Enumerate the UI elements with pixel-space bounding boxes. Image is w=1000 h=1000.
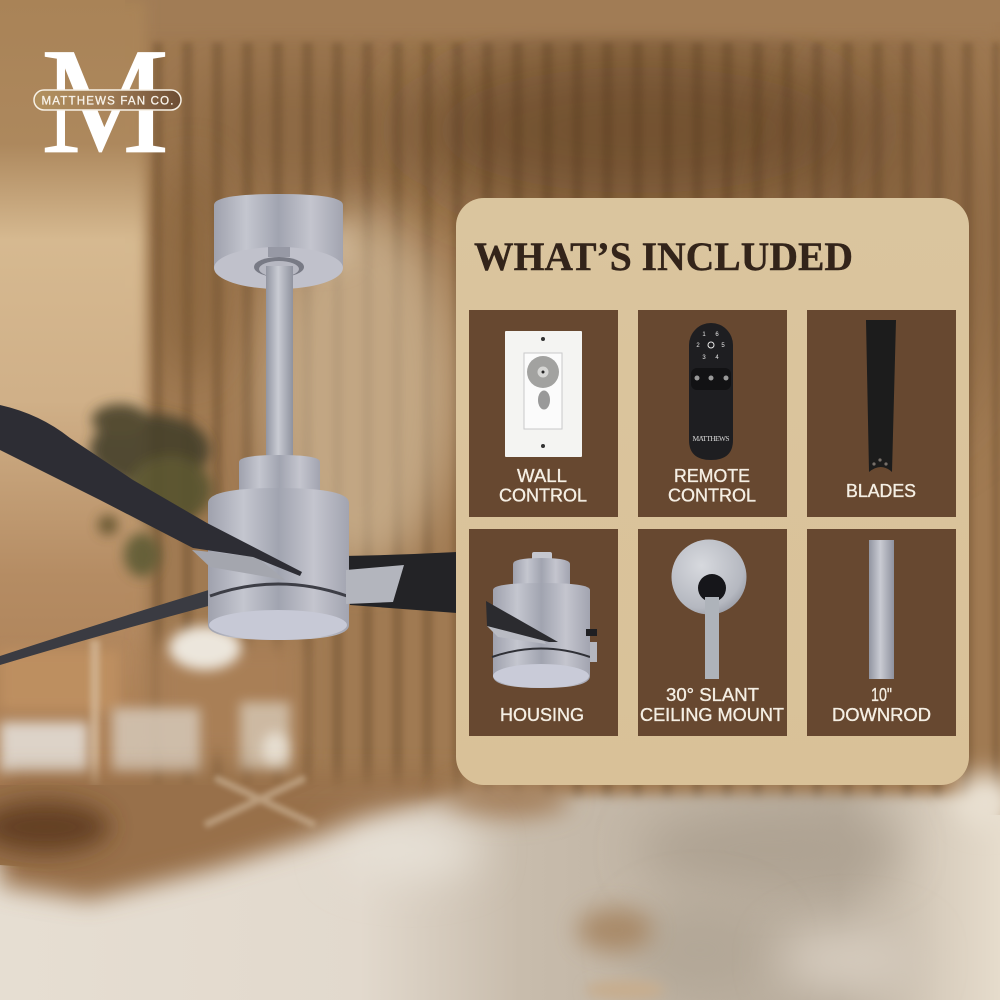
downrod bbox=[266, 266, 293, 456]
logo: Matthews Fan Co.: MATTHEWS FAN CO. bbox=[42, 96, 174, 108]
icon: remote: 6 bbox=[715, 332, 719, 338]
card: remote control: CONTROL bbox=[668, 486, 756, 506]
icon: remote: 3 bbox=[702, 355, 706, 361]
card: slant ceiling mount: CEILING MOUNT bbox=[640, 705, 784, 725]
card: wall control: WALL bbox=[517, 466, 567, 486]
card: wall control bbox=[469, 310, 618, 517]
card: slant ceiling mount: 30° SLANT bbox=[666, 685, 759, 705]
blade iron left bbox=[192, 550, 285, 580]
card: downrod: 10" bbox=[871, 685, 892, 705]
blurred floor bbox=[0, 772, 1000, 1000]
card: remote control bbox=[638, 310, 787, 517]
motor housing bbox=[208, 455, 349, 640]
card: blades bbox=[807, 310, 956, 517]
card: slant ceiling mount bbox=[638, 529, 787, 736]
icon: remote: 1 bbox=[702, 332, 706, 338]
far blade right bbox=[342, 552, 457, 613]
card: wall control: CONTROL bbox=[499, 486, 587, 506]
icon: remote: MATTHEWS bbox=[692, 434, 730, 443]
panel: what's included bbox=[456, 198, 969, 785]
ceiling band bbox=[0, 0, 1000, 36]
icon: wall control bbox=[505, 331, 582, 457]
icon: downrod bbox=[869, 540, 894, 679]
near blade left bbox=[0, 405, 302, 576]
wood slat wall bbox=[148, 40, 1000, 802]
card: downrod: DOWNROD bbox=[832, 705, 931, 725]
ceiling fan bbox=[0, 194, 457, 665]
icon: blade bbox=[866, 320, 896, 472]
icon: housing bbox=[486, 552, 597, 688]
icon: remote: 4 bbox=[715, 355, 719, 361]
logo: Matthews Fan Co.: M bbox=[41, 17, 169, 185]
icon: remote: 5 bbox=[721, 343, 725, 349]
card: housing: HOUSING bbox=[500, 705, 584, 725]
blurred furniture bbox=[0, 626, 300, 790]
heading: WHAT’S INCLUDED bbox=[474, 234, 853, 279]
lower left blade bbox=[0, 589, 212, 665]
card: blades: BLADES bbox=[846, 481, 916, 501]
left wall bbox=[0, 0, 146, 800]
icon: ceiling mount bbox=[672, 540, 746, 679]
icon: remote: 2 bbox=[696, 343, 700, 349]
card: remote control: REMOTE bbox=[674, 466, 750, 486]
icon: remote bbox=[689, 323, 733, 460]
blurred plant bbox=[90, 404, 212, 577]
ceiling canopy bbox=[214, 194, 343, 289]
card: downrod bbox=[807, 529, 956, 736]
card: housing bbox=[469, 529, 618, 736]
blade iron right bbox=[346, 565, 404, 604]
